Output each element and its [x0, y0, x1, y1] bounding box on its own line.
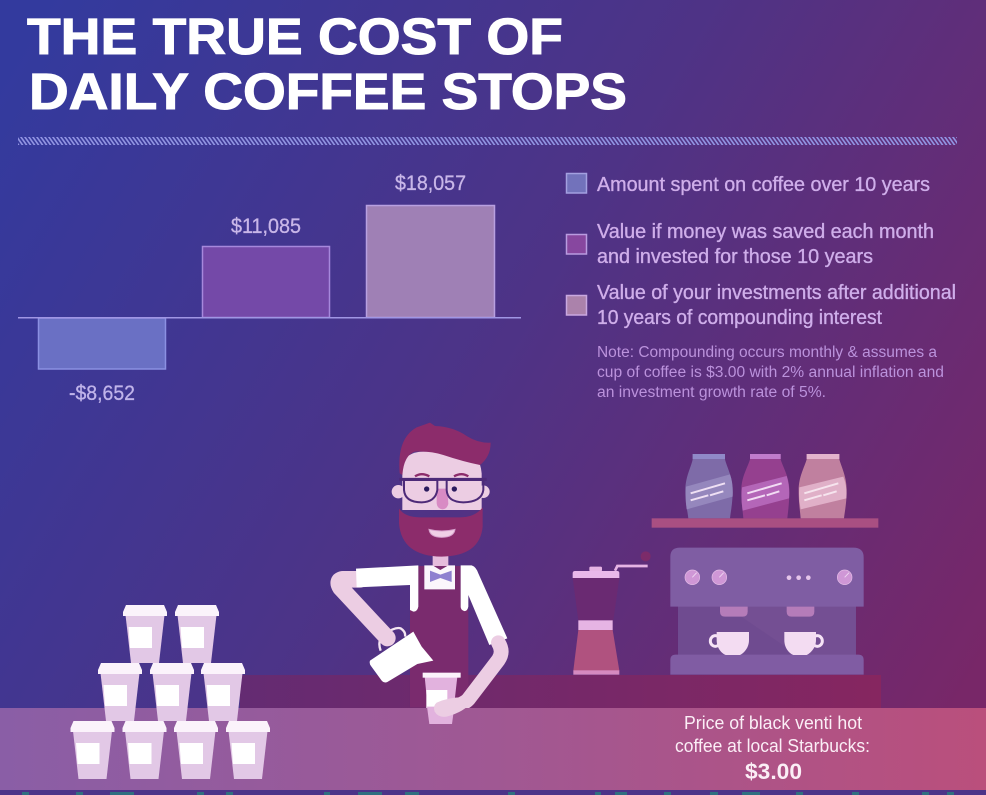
beard — [399, 507, 483, 557]
title: DAILY COFFEE STOPS — [29, 63, 627, 120]
legend text: spent: Amount spent on coffee over 10 years — [597, 174, 930, 196]
machine shadow — [678, 607, 800, 657]
counter front band — [0, 708, 986, 790]
barista — [339, 423, 507, 724]
value label: 18,057: $18,057 — [395, 172, 466, 195]
face — [402, 452, 482, 510]
legend text: invested — [597, 221, 934, 268]
jar magenta — [741, 454, 789, 518]
eyebrows — [415, 474, 468, 476]
legend text: compounding — [597, 282, 956, 329]
bar: after additional 10 years — [366, 206, 494, 318]
cup base — [427, 707, 454, 724]
legend text: invested: and invested for those 10 years — [597, 246, 873, 268]
left arm — [339, 579, 387, 638]
right arm — [445, 643, 501, 709]
value label: -8,652: -$8,652 — [69, 382, 135, 405]
counter back — [240, 675, 881, 708]
grinder handle — [615, 551, 651, 571]
pitcher handle — [379, 628, 405, 651]
ears — [392, 485, 490, 498]
legend — [566, 174, 956, 329]
collar and bow tie — [424, 565, 455, 589]
hand — [434, 697, 472, 717]
head — [392, 423, 491, 557]
title — [27, 8, 627, 120]
spouts — [720, 607, 814, 617]
price value: $3.00 — [745, 759, 802, 784]
right sleeve — [461, 565, 507, 645]
price caption: coffee at local Starbucks: — [675, 736, 870, 756]
right cup — [784, 632, 822, 655]
legend swatch: spent — [566, 174, 586, 193]
machine body — [678, 605, 856, 657]
jar pink — [799, 454, 847, 518]
bar chart — [18, 172, 521, 405]
machine base — [670, 655, 864, 675]
eyes — [424, 486, 457, 492]
neck — [433, 553, 448, 568]
hand and cup over counter — [427, 697, 472, 724]
espresso machine — [670, 548, 864, 675]
machine head — [670, 548, 864, 607]
bottom strip — [0, 790, 986, 795]
price caption: Price of black venti hot — [684, 713, 862, 733]
takeaway cup in hand — [423, 673, 461, 724]
note text — [597, 344, 944, 401]
legend text: compounding: 10 years of compounding interest — [597, 307, 882, 329]
price caption — [675, 713, 870, 784]
left sleeve — [356, 565, 418, 612]
bar: amount spent — [38, 318, 166, 369]
shelf — [652, 518, 878, 528]
note text: an investment growth rate of 5%. — [597, 384, 826, 401]
pitcher — [370, 632, 433, 682]
coffee jars — [685, 454, 847, 518]
hair — [399, 423, 491, 475]
left cup — [710, 632, 749, 655]
coffee grinder — [573, 551, 651, 675]
dials — [685, 570, 852, 585]
legend text: compounding: Value of your investments after additional — [597, 282, 956, 304]
title: THE TRUE COST OF — [27, 8, 563, 65]
mouth — [429, 529, 455, 537]
nose — [437, 489, 448, 509]
chart axis — [18, 317, 521, 318]
jar blue — [685, 454, 733, 518]
legend text: invested: Value if money was saved each month — [597, 221, 934, 243]
legend swatch: compounding — [566, 296, 586, 315]
glasses — [399, 479, 487, 502]
note text: cup of coffee is $3.00 with 2% annual inflation and — [597, 364, 944, 381]
legend swatch: invested — [566, 234, 586, 254]
stack of coffee cups — [70, 605, 270, 779]
note text: Note: Compounding occurs monthly & assumes a — [597, 344, 937, 361]
bar: invested for 10 years — [202, 246, 330, 318]
value label: 11,085: $11,085 — [231, 215, 301, 238]
coffee machine area — [573, 454, 878, 675]
apron — [410, 566, 468, 707]
indicator lights — [787, 575, 811, 580]
